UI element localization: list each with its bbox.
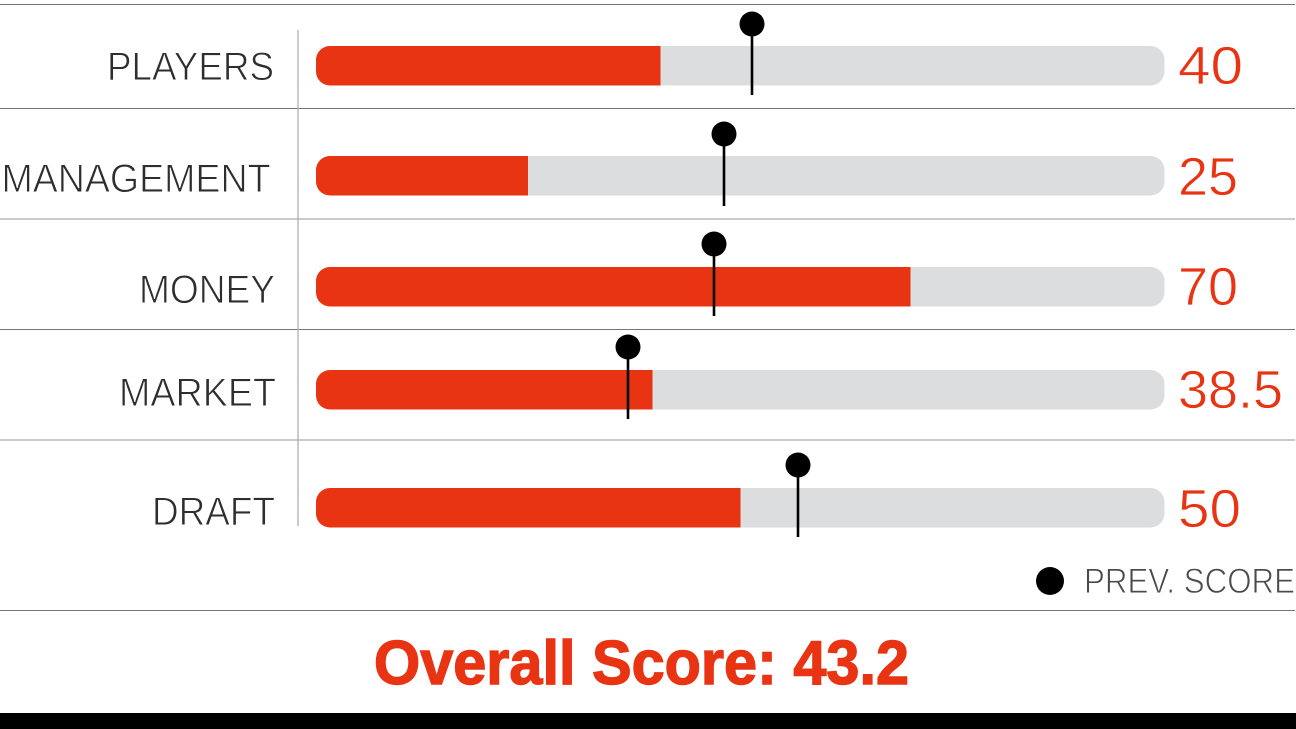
value: money: 70 <box>1178 257 1238 317</box>
label: players: PLAYERS <box>107 45 274 89</box>
bar fill: management <box>316 156 528 196</box>
marker: draft previous score <box>786 452 810 537</box>
value: draft: 50 <box>1178 479 1241 539</box>
row: players <box>107 12 1243 96</box>
bar fill: market <box>316 370 652 410</box>
marker: money previous score <box>702 232 726 316</box>
marker: management previous score <box>712 122 736 206</box>
legend: previous score <box>1036 562 1295 601</box>
label: money: MONEY <box>139 268 275 312</box>
bar fill: money <box>316 267 910 306</box>
bar track: players <box>316 46 1164 86</box>
label: draft: DRAFT <box>152 490 275 534</box>
bar track: draft <box>316 488 1164 528</box>
row: management <box>2 122 1238 207</box>
value: market: 38.5 <box>1178 360 1283 420</box>
row: draft <box>152 452 1241 539</box>
row: market <box>119 334 1283 420</box>
bar track: management <box>316 156 1164 196</box>
row: money <box>139 232 1238 317</box>
marker: players previous score <box>740 12 764 95</box>
label: market: MARKET <box>119 371 276 415</box>
value: management: 25 <box>1178 147 1238 207</box>
bar fill: players <box>316 46 660 86</box>
bar track: market <box>316 370 1164 410</box>
bar track: money <box>316 267 1164 306</box>
bar fill: draft <box>316 488 740 528</box>
marker: market previous score <box>616 334 640 419</box>
icon: legend dot <box>1036 567 1064 595</box>
bottom black band <box>0 713 1296 729</box>
label: management: MANAGEMENT <box>2 157 270 201</box>
overall score: Overall Score: 43.2 <box>374 629 909 698</box>
value: players: 40 <box>1178 36 1243 96</box>
